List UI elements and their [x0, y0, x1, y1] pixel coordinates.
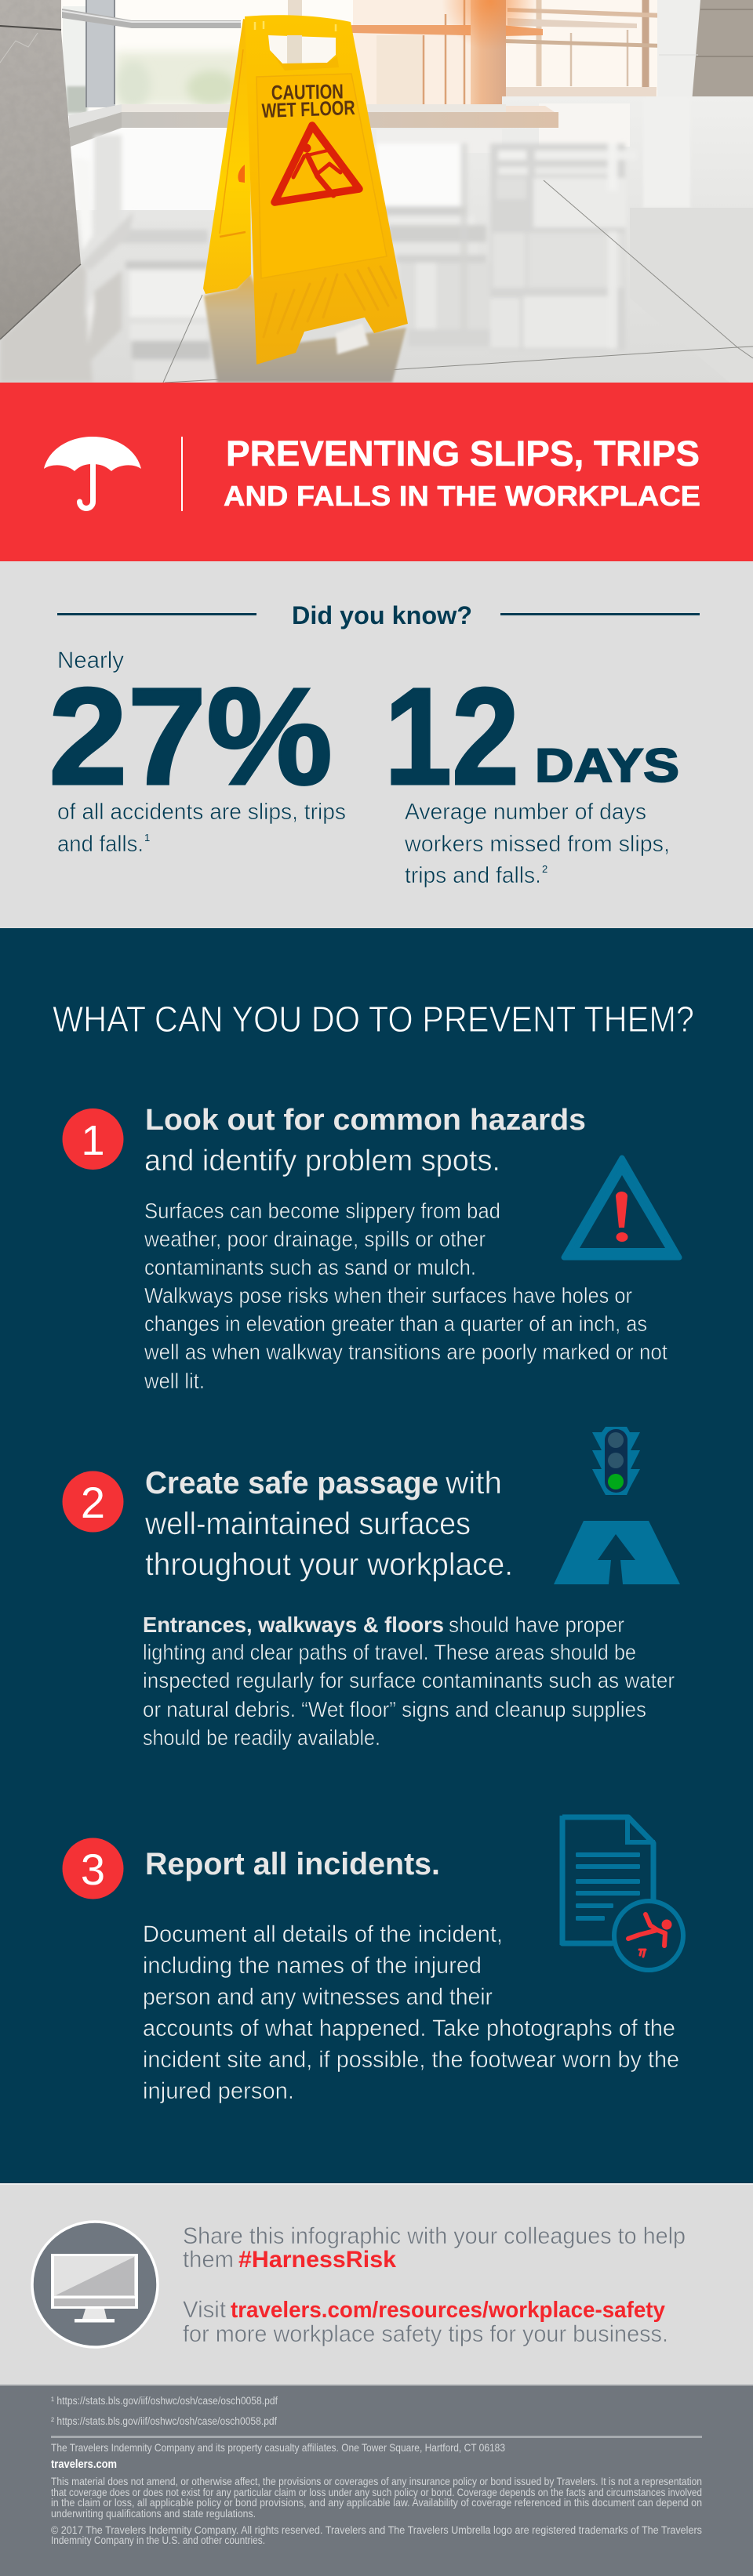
footnotes: ² https://stats.bls.gov/iif/oshwc/osh/case/osch0058.pdf: [51, 2415, 277, 2427]
icon: incident report document: [562, 1816, 683, 1970]
stat: 27 percent: 27%: [49, 660, 333, 814]
heading rule left: [57, 613, 256, 615]
icon: computer monitor in circle: [32, 2222, 158, 2347]
step 2 body: or natural debris. “Wet floor” signs and cleanup supplies: [143, 1697, 646, 1722]
step 1 heading: and identify problem spots.: [144, 1145, 500, 1177]
step 3 heading: Report all incidents.: [145, 1847, 440, 1881]
text: visit link: Visit: [183, 2297, 227, 2323]
step 3: report all incidents: [63, 1816, 683, 2104]
sub-element: tile joints: [163, 180, 753, 383]
step 2 heading: well-maintained surfaces: [144, 1507, 471, 1541]
step 3 body: including the names of the injured: [143, 1953, 482, 1979]
sub-element: sign: [203, 15, 408, 365]
number badge 2: [63, 1471, 124, 1532]
icon: road with arrow: [554, 1521, 680, 1584]
number badge 1: [63, 1108, 124, 1170]
step 1 body: changes in elevation greater than a quarter of an inch, as: [144, 1312, 647, 1336]
icon: warning triangle: [564, 1158, 679, 1257]
step 2 body: Entrances, walkways & floors: [143, 1613, 444, 1637]
panel: footer legal text: [0, 2384, 753, 2576]
heading rule right: [500, 613, 700, 615]
step 1 body: [144, 1199, 668, 1393]
step 2 heading: [144, 1466, 513, 1582]
step 3 body: person and any witnesses and their: [143, 1984, 493, 2010]
disclaimer: underwriting qualifications and state regulations.: [51, 2508, 256, 2520]
text: share of accidents: [57, 800, 346, 857]
company address: The Travelers Indemnity Company and its property casualty affiliates. One Tower Square, Hartford, CT 06183: [51, 2441, 505, 2454]
step 2: create safe passage: [63, 1427, 680, 1750]
icon: traffic light: [592, 1427, 640, 1495]
number badge 2: 2: [81, 1478, 105, 1527]
sub-element: slipping figure warning triangle: [275, 125, 359, 202]
text: share message: Share this infographic with your colleagues to help: [183, 2223, 686, 2249]
text: share of accidents: of all accidents are slips, trips: [57, 800, 346, 825]
number badge 1: 1: [81, 1117, 105, 1164]
title line 2: AND FALLS IN THE WORKPLACE: [224, 480, 700, 512]
step 1 body: Walkways pose risks when their surfaces have holes or: [144, 1283, 632, 1308]
sub-element: caution wording: CAUTION: [271, 79, 344, 104]
panel: did you know statistics: [0, 561, 753, 928]
text: visit link: travelers.com/resources/workplace-safety: [231, 2298, 665, 2323]
text: visit link: [183, 2297, 668, 2347]
text: average days missed: 2: [542, 863, 547, 875]
step 2 heading: throughout your workplace.: [145, 1547, 513, 1582]
icon: umbrella logo: [44, 437, 141, 508]
stat: days: DAYS: [535, 739, 679, 792]
step 1 heading: [144, 1104, 586, 1177]
disclaimer: [51, 2476, 702, 2520]
panel: share call to action: [0, 2183, 753, 2385]
step 1 heading: Look out for common hazards: [145, 1104, 586, 1137]
title line 1: PREVENTING SLIPS, TRIPS: [226, 434, 700, 473]
sub-element: wet floor wording: WET FLOOR: [261, 97, 355, 122]
copyright: [51, 2524, 702, 2546]
footer rule: [51, 2436, 702, 2438]
website: travelers.com: [51, 2458, 117, 2471]
text: share message: #HarnessRisk: [238, 2247, 396, 2273]
text: average days missed: trips and falls.: [405, 863, 541, 888]
footnotes: [51, 2395, 278, 2427]
sub-element: window ledge: [69, 104, 559, 147]
step 1 body: contaminants such as sand or mulch.: [144, 1255, 476, 1279]
step 3 body: [143, 1921, 679, 2104]
text: nearly: Nearly: [57, 648, 124, 673]
disclaimer: in the claim or loss, all applicable policy or bond provisions, and any applicable law. Availability of coverage referenced in this document can depend on: [51, 2497, 702, 2509]
text: average days missed: Average number of days: [405, 800, 646, 825]
step 3 body: incident site and, if possible, the footwear worn by the: [143, 2047, 679, 2073]
number badge 3: 3: [81, 1845, 105, 1894]
sub-element: handrails and railings: [62, 0, 665, 107]
sub-element: floor reflections: [0, 135, 637, 383]
footnotes: ¹ https://stats.bls.gov/iif/oshwc/osh/case/osch0058.pdf: [51, 2395, 278, 2407]
text: average days missed: workers missed from slips,: [404, 832, 670, 857]
heading: what can you do: WHAT CAN YOU DO TO PREVENT THEM?: [53, 999, 694, 1039]
text: share message: [183, 2223, 686, 2273]
step 2 body: should have proper: [449, 1613, 624, 1637]
banner: red title band: [0, 383, 753, 561]
step 1 body: Surfaces can become slippery from bad: [144, 1199, 500, 1223]
sub-element: bright window background: [63, 0, 657, 116]
step 3 body: Document all details of the incident,: [143, 1921, 503, 1947]
panel: what can you do: [0, 928, 753, 2183]
photo: wet floor caution sign in a lobby: [0, 0, 753, 383]
sub-element: stone wall: [0, 0, 86, 345]
text: share of accidents: 1: [144, 832, 150, 844]
copyright: Indemnity Company in the U.S. and other countries.: [51, 2534, 265, 2546]
step 1: look out for hazards: [63, 1104, 679, 1393]
text: visit link: for more workplace safety tips for your business.: [183, 2321, 668, 2347]
step 2 body: inspected regularly for surface contaminants such as water: [143, 1668, 675, 1693]
sub-element: polished floor: [0, 96, 753, 383]
copyright: © 2017 The Travelers Indemnity Company. All rights reserved. Travelers and The Travelers Umbrella logo are registered trademarks of The Travelers: [51, 2524, 702, 2536]
step 2 body: lighting and clear paths of travel. These areas should be: [143, 1640, 636, 1664]
text: share of accidents: and falls.: [57, 832, 144, 857]
sub-element: right wall: [657, 0, 753, 102]
number badge 3: [63, 1838, 124, 1899]
heading: did you know: Did you know?: [292, 601, 472, 629]
text: average days missed: [404, 800, 670, 888]
stat: 12: 12: [384, 660, 519, 814]
step 2 heading: with: [445, 1466, 502, 1500]
step 2 body: should be readily available.: [143, 1725, 380, 1750]
step 3 body: accounts of what happened. Take photographs of the: [143, 2015, 675, 2041]
step 1 body: well as when walkway transitions are poorly marked or not: [144, 1340, 668, 1364]
divider: [181, 437, 183, 511]
step 2 body: [143, 1613, 675, 1750]
step 1 body: well lit.: [144, 1369, 205, 1393]
step 3 body: injured person.: [143, 2078, 294, 2104]
sub-element: sign shadow: [204, 273, 406, 383]
step 1 body: weather, poor drainage, spills or other: [144, 1227, 486, 1251]
step 2 heading: Create safe passage: [145, 1466, 438, 1500]
text: share message: them: [183, 2247, 234, 2273]
